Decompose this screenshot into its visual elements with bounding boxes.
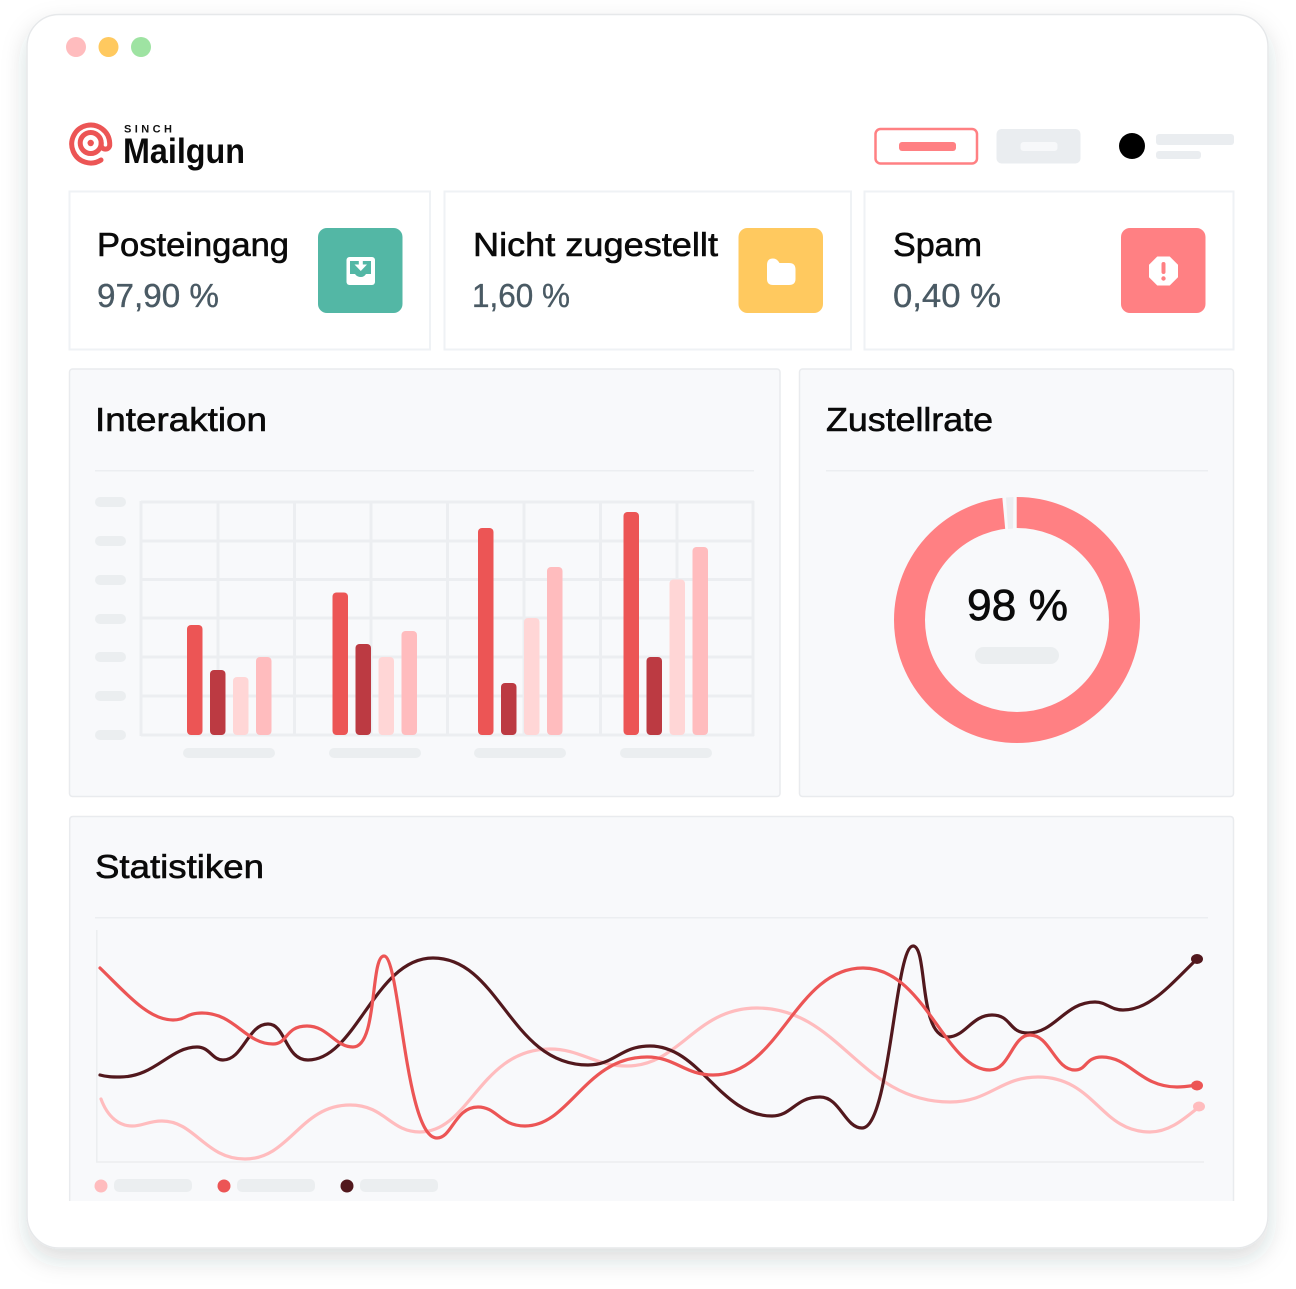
grey button bbox=[996, 129, 1080, 164]
line chart bbox=[97, 930, 1205, 1162]
series: dark line bbox=[100, 946, 1197, 1128]
donut value: 98 % bbox=[967, 581, 1068, 630]
panel: Spam bbox=[864, 192, 1234, 350]
value: 0,40 % bbox=[893, 277, 1001, 314]
series: pink line bbox=[101, 1008, 1199, 1159]
outlined button bbox=[876, 129, 977, 164]
panel: Zustellrate bbox=[800, 369, 1234, 796]
logo wordmark: Mailgun bbox=[123, 132, 245, 171]
heading: Zustellrate bbox=[826, 401, 993, 438]
icon: inbox bbox=[318, 228, 402, 313]
value: 1,60 % bbox=[472, 277, 570, 314]
icon: alert bbox=[1121, 228, 1206, 313]
heading: Nicht zugestellt bbox=[473, 226, 718, 263]
icon: at sign bbox=[72, 125, 110, 163]
panel: Posteingang bbox=[70, 192, 430, 350]
legend bbox=[94, 1179, 438, 1192]
logo: Sinch Mailgun bbox=[72, 124, 245, 171]
heading: Spam bbox=[893, 226, 982, 263]
logo wordmark small: SINCH bbox=[124, 124, 172, 136]
panel: Nicht zugestellt bbox=[444, 192, 851, 350]
value: 97,90 % bbox=[97, 277, 219, 314]
heading: Statistiken bbox=[95, 848, 264, 885]
icon: folder bbox=[738, 228, 823, 313]
bar chart bbox=[95, 497, 754, 758]
window control dots bbox=[66, 37, 151, 57]
heading: Interaktion bbox=[95, 401, 267, 438]
header controls bbox=[876, 129, 1234, 164]
user avatar bbox=[1119, 133, 1145, 159]
panel: Interaktion bbox=[70, 369, 780, 796]
donut chart bbox=[910, 494, 1124, 728]
panel: Statistiken bbox=[69, 816, 1234, 1201]
series: red line bbox=[100, 956, 1197, 1138]
heading: Posteingang bbox=[97, 226, 289, 263]
